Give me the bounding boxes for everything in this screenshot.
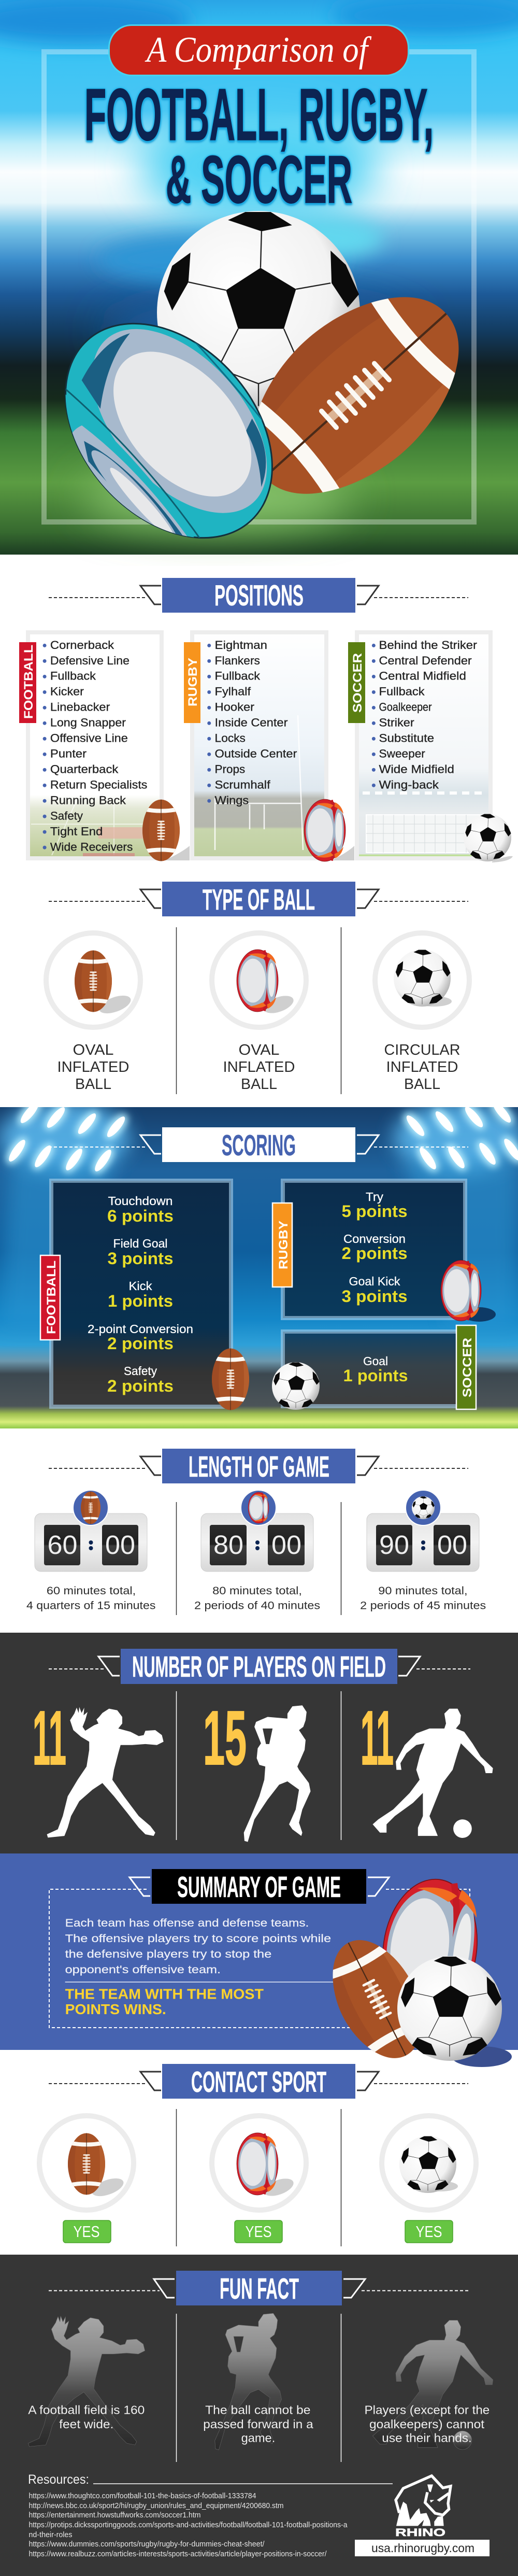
captions: game length: 80 minutes total, [212,1584,302,1597]
contact: soccer [382,2116,476,2243]
list: rugby positions: Props [215,763,245,776]
contact: rugby [212,2116,306,2243]
summary text: opponent's offensive team. [65,1963,221,1976]
scoreboard: soccer: 90 [379,1530,409,1560]
section heading: contact sport: CONTACT SPORT [191,2065,326,2099]
scoreboard: football [35,1490,147,1572]
title pill [108,24,409,76]
list: rugby positions: Locks [215,732,246,745]
fun fact: rugby [203,2313,313,2450]
list: rugby positions: Fylhalf [215,685,251,698]
fun fact: soccer: goalkeepers) cannot [369,2417,485,2431]
tab: football [40,1255,60,1340]
scoring: football: Field Goal [113,1237,168,1250]
list: soccer positions: Substitute [379,732,434,745]
scoreboard: rugby: 00 [271,1530,301,1560]
list: soccer positions: Central Defender [379,654,472,667]
type: football [46,933,140,1093]
scoring: football: 2-point Conversion [88,1322,193,1336]
scoring: soccer: Goal [363,1354,388,1368]
tab: football: FOOTBALL [45,1261,59,1334]
button: yes: YES [246,2223,271,2241]
stadium lights left [0,1100,130,1327]
scoreboard: football: 60 [48,1530,78,1560]
scoring: football: 6 points [107,1207,174,1225]
resources: https://entertainment.howstuffworks.com/soccer1.htm [29,2511,201,2520]
soccer player count: 11 [361,1695,394,1781]
scoring: rugby [272,1181,465,1318]
icon: soccer ball [272,1362,320,1410]
list: rugby positions: Inside Center [215,716,288,729]
tab: football [19,642,36,723]
section heading: number of players on field [49,1649,470,1684]
tab: soccer: SOCCER [461,1338,474,1397]
rhino logo: RHINO [395,2527,445,2539]
list: football positions: Wide Receivers [50,840,133,853]
list: rugby positions: Eightman [215,639,267,652]
type: football: OVAL [73,1042,114,1058]
rhino logo: usa.rhinorugby.com [371,2541,474,2555]
icon: rugby badge [241,1490,276,1525]
scoring: rugby: 3 points [342,1287,407,1306]
section heading: fun fact [49,2271,470,2305]
contact dividers [176,2109,341,2246]
resources: https://www.dummies.com/sports/rugby/rugby-for-dummies-cheat-sheet/ [29,2540,265,2549]
resources: nd-their-roles [29,2530,73,2539]
scoring: football: Safety [124,1364,157,1378]
fun fact: football [28,2316,145,2446]
scoreboard: soccer [367,1490,479,1572]
list: football positions: Tight End [50,825,103,838]
resources: Resources: [28,2472,89,2487]
scoring: rugby: Try [366,1190,384,1204]
title frame [44,52,474,522]
football player count: 11 [33,1695,66,1781]
list: rugby positions: Scrumhalf [215,779,271,791]
section heading: summary of game: SUMMARY OF GAME [177,1871,341,1904]
contact: football [39,2116,134,2243]
scoreboard: football: 00 [105,1530,135,1560]
captions: game length: 60 minutes total, [47,1584,136,1597]
list: soccer positions: Wide Midfield [379,763,454,776]
tab: rugby [272,1203,292,1287]
list: football positions: Return Specialists [50,779,147,791]
resources [28,2472,393,2558]
fun fact: soccer [364,2320,493,2450]
panel: fun fact [0,2255,518,2576]
button: yes [63,2220,111,2243]
captions: game length: 2 periods of 40 minutes [194,1599,320,1612]
list: soccer positions: Fullback [379,685,425,698]
list: rugby positions [207,639,297,807]
type: football: BALL [75,1076,111,1093]
list: soccer positions: Central Midfield [379,670,466,683]
list: soccer positions [372,639,478,791]
section heading: scoring: SCORING [222,1129,296,1162]
list: rugby positions: Fullback [215,670,261,683]
captions: game length: 4 quarters of 15 minutes [26,1599,156,1612]
scoring: football [40,1181,231,1407]
list: soccer positions: Behind the Striker [379,639,478,652]
list: football positions: Offensive Line [50,732,128,745]
rugby player count: 15 [203,1695,247,1781]
list: rugby positions: Flankers [215,654,260,667]
american football [215,259,496,532]
fun fact: soccer: use their hands. [382,2431,472,2444]
list: rugby positions: Wings [215,794,249,807]
type: soccer [375,933,469,1093]
icon: rugby ball [441,1261,496,1322]
type: football: INFLATED [57,1059,130,1075]
type: soccer: CIRCULAR [384,1042,460,1058]
fun fact: football: A football field is 160 [28,2403,145,2416]
button: yes [235,2220,282,2243]
button: yes: YES [415,2223,442,2241]
type: rugby [212,933,306,1093]
icon: soccer badge [406,1490,441,1525]
panel: scoring [0,1100,518,1428]
fun fact: rugby: passed forward in a [203,2417,313,2431]
tab: soccer: SOCCER [351,653,365,713]
tab: rugby [184,642,200,723]
scoring: football: 1 points [108,1292,173,1310]
hero banner [0,0,518,582]
list: football positions: Safety [50,810,83,823]
scoring: soccer [283,1325,476,1409]
list: football positions: Running Back [50,794,126,807]
section heading: summary of game [130,1869,389,1904]
scoring: football: 2 points [107,1377,174,1395]
summary text [65,1916,334,2017]
list: football positions: Linebacker [50,701,110,714]
resources: https://protips.dickssportinggoods.com/sports-and-activities/football/football-101-football-positions-a [29,2521,348,2529]
length dividers [176,1502,341,1615]
panel: soccer positions [348,632,513,862]
tab: rugby: RUGBY [277,1221,291,1269]
scoring: football: 2 points [107,1334,174,1353]
scoring: football: Kick [128,1279,152,1293]
tab: rugby: RUGBY [186,658,200,706]
panel: summary of game [0,1853,518,2073]
list: soccer positions: Wing-back [379,779,439,791]
tab: soccer [348,642,365,723]
list: football positions: Kicker [50,685,84,698]
list: football positions: Defensive Line [50,654,130,667]
list: soccer positions: Sweeper [379,747,425,760]
button: yes: YES [74,2223,99,2241]
scoring: football: Touchdown [108,1194,173,1208]
type: rugby: INFLATED [223,1059,295,1075]
section heading: length of game [49,1449,468,1483]
icon: soccer ball with shadow [464,814,513,862]
section heading: length of game: LENGTH OF GAME [189,1450,329,1483]
scoring: rugby: Goal Kick [349,1275,400,1288]
list: football positions: Punter [50,747,87,760]
balls cluster [314,1873,512,2073]
rugby ball [65,322,273,539]
title pill: A Comparison of [145,30,372,70]
summary text: the defensive players try to stop the [65,1947,271,1960]
type: soccer: BALL [404,1076,440,1093]
fun fact: football: feet wide. [59,2417,113,2431]
section heading: fun fact: FUN FACT [220,2272,299,2305]
resources: https://www.thoughtco.com/football-101-the-basics-of-football-1333784 [29,2492,256,2500]
panel: rugby positions [184,632,354,861]
scoring: soccer: 1 points [343,1366,408,1385]
list: soccer positions: Striker [379,716,414,729]
section heading: positions: POSITIONS [214,579,304,612]
rhino logo [355,2476,490,2556]
list: football positions [43,639,147,853]
summary text: Each team has offense and defense teams. [65,1916,309,1929]
fun fact: soccer: Players (except for the [364,2403,490,2416]
tab: soccer [456,1325,476,1409]
section heading: positions [49,578,468,613]
type: rugby: OVAL [238,1042,280,1058]
section heading: scoring [49,1127,468,1162]
section heading: type of ball: TYPE OF BALL [203,883,315,916]
resources: http://news.bbc.co.uk/sport2/hi/rugby_union/rules_and_equipment/4200680.stm [29,2501,284,2510]
list: football positions: Cornerback [50,639,114,652]
title text [84,74,434,217]
icon: football badge [73,1490,108,1525]
scoring: rugby: Conversion [343,1232,406,1245]
list: rugby positions: Outside Center [215,747,297,760]
section heading: contact sport [49,2064,468,2099]
fun fact: rugby: game. [241,2431,275,2444]
football player count [33,1695,164,1837]
icon: rugby ball with shadow [304,799,354,861]
title text: & SOCCER [166,141,352,217]
panel: football positions [19,632,190,861]
soccer ball [157,211,360,414]
button: yes [405,2220,453,2243]
rugby player count [203,1695,311,1842]
tab: football: FOOTBALL [22,645,36,719]
scoreboard: soccer: 00 [437,1530,467,1560]
captions: game length [26,1584,486,1612]
summary text: POINTS WINS. [65,2001,166,2017]
fun fact: rugby: The ball cannot be [205,2403,311,2416]
captions: game length: 90 minutes total, [378,1584,467,1597]
scoreboard: rugby: 80 [213,1530,243,1560]
icon: football with shadow [142,800,190,861]
list: football positions: Quarterback [50,763,119,776]
type of ball dividers [176,927,341,1094]
stadium lights right [394,1100,518,1327]
list: football positions: Long Snapper [50,716,126,729]
panel: number of players [0,1633,518,1853]
captions: game length: 2 periods of 45 minutes [360,1599,486,1612]
resources: https://www.realbuzz.com/articles-interests/sports-activities/article/player-positions-in-soccer/ [29,2550,327,2558]
type: soccer: INFLATED [386,1059,458,1075]
scoring: rugby: 5 points [342,1202,407,1221]
list: rugby positions: Hooker [215,701,255,714]
section heading: type of ball [49,882,468,916]
list: football positions: Fullback [50,670,96,683]
icon: football [212,1349,249,1410]
scoreboard: rugby [201,1490,313,1572]
type: rugby: BALL [241,1076,277,1093]
scoring: football: 3 points [108,1249,173,1268]
summary text: THE TEAM WITH THE MOST [65,1986,264,2002]
scoring: rugby: 2 points [342,1244,407,1263]
soccer player count [361,1695,493,1838]
list: soccer positions: Goalkeeper [379,701,432,714]
summary text: The offensive players try to score points while [65,1932,331,1945]
